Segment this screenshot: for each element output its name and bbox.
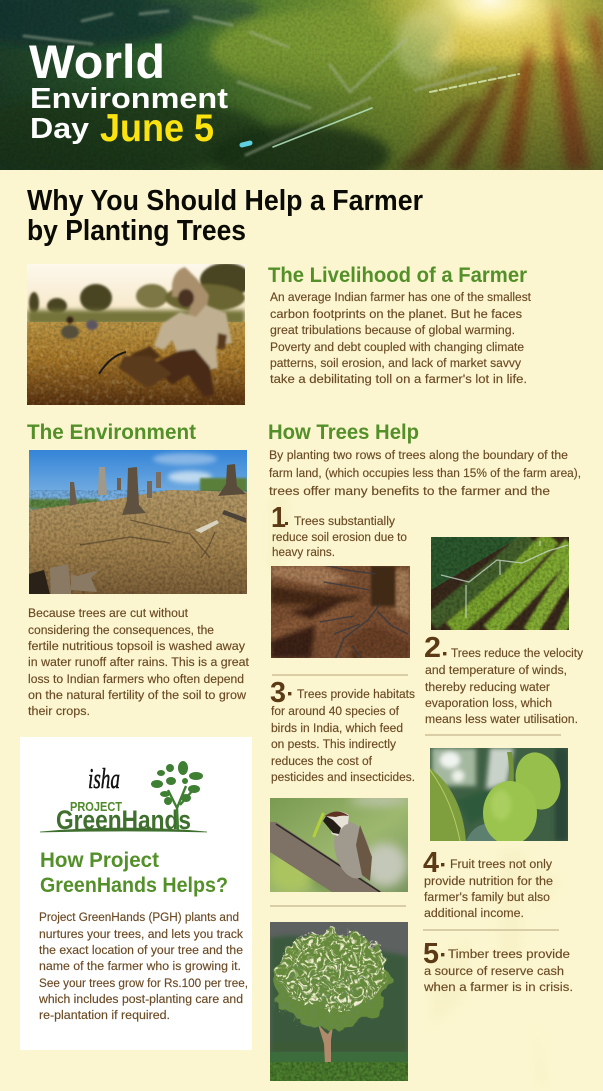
point 3: reduces the cost of <box>271 754 373 768</box>
banner title <box>29 44 228 144</box>
photo: green mangoes <box>430 747 568 845</box>
text block: environment: loss to Indian farmers who often depend <box>28 672 244 686</box>
logo: Isha Project GreenHands: GreenHands <box>56 805 191 835</box>
point 4: provide nutrition for the <box>424 874 553 888</box>
panel text <box>38 910 248 1022</box>
logo: Isha Project GreenHands <box>40 761 207 835</box>
heading: How Trees Help: How Trees Help <box>268 421 419 444</box>
logo: Isha Project GreenHands: PROJECT <box>70 799 122 814</box>
point 1: 1 <box>271 502 286 534</box>
panel heading <box>40 849 228 897</box>
banner title: June 5 <box>100 107 214 150</box>
main title: by Planting Trees <box>27 215 246 247</box>
photo: farmer in field <box>27 263 252 405</box>
point 2: Trees reduce the velocity <box>451 646 584 660</box>
banner title: World <box>29 35 165 88</box>
photo: flowering timber tree <box>270 922 408 1081</box>
panel: How Project GreenHands Helps <box>20 737 252 1050</box>
point 2: and temperature of winds, <box>425 663 567 677</box>
panel text: See your trees grow for Rs.100 per tree, <box>39 976 248 990</box>
divider after bird photo <box>270 905 406 907</box>
text block: environment: their crops. <box>28 704 90 718</box>
point 1 <box>271 502 407 559</box>
point 3: pesticides and insecticides. <box>271 770 415 784</box>
point 3 <box>270 677 415 784</box>
text block: environment <box>28 606 250 718</box>
point 4 <box>423 847 553 920</box>
photo: irrigated crop rows <box>431 537 575 632</box>
main title <box>27 185 423 247</box>
text block: environment: in water runoff after rains. This is a great <box>28 655 250 669</box>
text block: livelihood <box>270 290 532 386</box>
main title: Why You Should Help a Farmer <box>27 185 423 217</box>
point 3: 3 <box>270 677 286 709</box>
point 4: additional income. <box>424 906 524 920</box>
banner title: Environment <box>30 83 228 115</box>
heading: The Environment: The Environment <box>27 421 196 444</box>
point 3: birds in India, which feed <box>271 721 403 735</box>
text block: how trees help intro <box>269 448 581 498</box>
point 1: Trees substantially <box>294 514 396 528</box>
text block: livelihood: carbon footprints on the planet. But he faces <box>270 307 522 321</box>
point 3: for around 40 species of <box>271 704 400 718</box>
point 2: thereby reducing water <box>425 680 550 694</box>
text block: environment: Because trees are cut without <box>28 606 189 620</box>
divider after point 4 <box>423 929 559 931</box>
header banner photo: sprinkler field at sunrise <box>0 0 603 185</box>
logo: Isha Project GreenHands: isha <box>88 763 120 795</box>
banner title: Day <box>30 113 89 145</box>
panel text: name of the farmer who is growing it. <box>39 959 241 973</box>
point 5: 5 <box>423 938 439 970</box>
text block: environment: considering the consequences, the <box>28 623 214 637</box>
point 5: a source of reserve cash <box>424 964 564 978</box>
point 5: Timber trees provide <box>448 947 570 961</box>
text block: livelihood: Poverty and debt coupled with changing climate <box>270 340 524 354</box>
panel heading: How Project <box>40 849 159 872</box>
text block: how trees help intro: farm land, (which occupies less than 15% of the farm area), <box>269 466 581 480</box>
text block: livelihood: An average Indian farmer has one of the smallest <box>270 290 532 304</box>
point 5 <box>423 938 573 994</box>
panel text: re-plantation if required. <box>39 1008 170 1022</box>
point 2: means less water utilisation. <box>425 712 578 726</box>
panel heading: GreenHands Helps? <box>40 874 228 897</box>
point 3: Trees provide habitats <box>297 687 415 701</box>
panel text: the exact location of your tree and the <box>39 943 243 957</box>
point 1: heavy rains. <box>272 545 335 559</box>
panel text: Project GreenHands (PGH) plants and <box>39 910 239 924</box>
photo: tree stumps on eroded land <box>29 450 247 600</box>
point 1: reduce soil erosion due to <box>272 530 407 544</box>
photo: exposed tree roots <box>271 564 410 658</box>
point 2: evaporation loss, which <box>425 696 552 710</box>
photo: bird with caterpillar on branch <box>268 794 410 894</box>
text block: livelihood: great tribulations because of global warming. <box>270 323 515 337</box>
point 4: 4 <box>423 847 439 879</box>
sun-lit field rays <box>0 0 603 185</box>
text block: how trees help intro: trees offer many benefits to the farmer and the <box>269 484 550 498</box>
point 5: when a farmer is in crisis. <box>423 980 573 994</box>
text block: livelihood: patterns, soil erosion, and lack of market savvy <box>270 356 522 370</box>
point 2 <box>424 632 584 726</box>
panel text: which includes post-planting care and <box>38 992 243 1006</box>
text block: environment: fertile nutritious topsoil is washed away <box>28 639 246 653</box>
heading: The Livelihood of a Farmer: The Livelihood of a Farmer <box>268 264 527 287</box>
point 3: on pests. This indirectly <box>271 737 397 751</box>
divider after point 1 <box>272 674 408 676</box>
text block: livelihood: take a debilitating toll on a farmer's lot in life. <box>270 372 527 386</box>
point 4: farmer's family but also <box>424 890 550 904</box>
point 4: Fruit trees not only <box>450 857 553 871</box>
text block: how trees help intro: By planting two rows of trees along the boundary of the <box>269 448 568 462</box>
irrigation pipes and water streaks <box>24 11 519 155</box>
divider after point 2 <box>425 734 561 736</box>
point 2: 2 <box>424 632 441 664</box>
panel text: nurtures your trees, and lets you track <box>39 927 244 941</box>
text block: environment: on the natural fertility of the soil to grow <box>28 688 246 702</box>
